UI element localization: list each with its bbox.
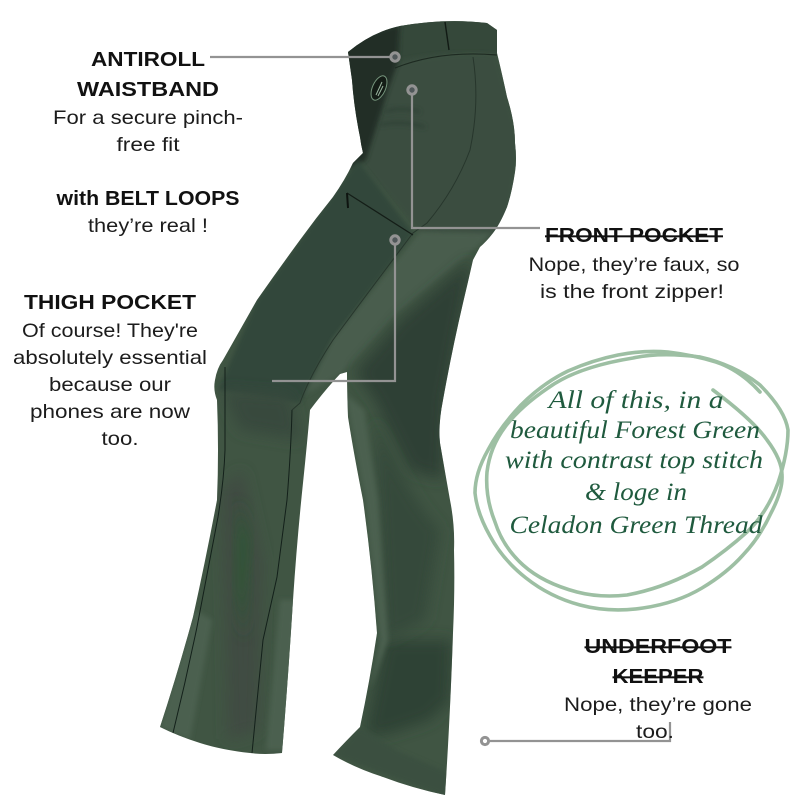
text block: belt loops: they’re real ! xyxy=(88,215,208,237)
text block: thigh pocket: because our xyxy=(49,374,172,396)
script note: with contrast top stitch xyxy=(505,447,763,474)
leader line: waistband xyxy=(210,53,399,61)
text block: antiroll waistband: WAISTBAND xyxy=(77,79,219,101)
text block: front pocket xyxy=(528,225,740,303)
text block: front pocket: FRONT POCKET xyxy=(545,225,723,247)
leader line: thigh pocket xyxy=(272,236,399,381)
script note: Celadon Green Thread xyxy=(510,512,763,539)
script note: & loge in xyxy=(585,479,687,506)
waistband and hip shading xyxy=(399,21,497,60)
text block: belt loops xyxy=(55,188,239,237)
hip wrinkles xyxy=(380,109,425,127)
text block: underfoot keeper: Nope, they’re gone xyxy=(564,694,752,716)
text block: antiroll waistband xyxy=(53,49,243,156)
leader line: underfoot keeper xyxy=(481,722,670,745)
front thigh panel shading xyxy=(218,160,413,403)
text block: antiroll waistband: ANTIROLL xyxy=(91,49,205,71)
text block: thigh pocket: absolutely essential xyxy=(13,347,207,369)
hand-drawn circle xyxy=(475,351,788,610)
text block: belt loops: with BELT LOOPS xyxy=(55,188,239,210)
script note: beautiful Forest Green xyxy=(510,417,760,444)
script note: All of this, in a xyxy=(546,387,724,414)
text block: thigh pocket: phones are now xyxy=(30,401,191,423)
text block: underfoot keeper: UNDERFOOT xyxy=(584,636,732,658)
seams xyxy=(173,367,225,733)
text block: front pocket: Nope, they’re faux, so xyxy=(528,254,740,276)
script note xyxy=(505,387,763,539)
logo badge xyxy=(368,73,390,103)
text block: front pocket: is the front zipper! xyxy=(540,281,724,303)
leader line: front pocket xyxy=(408,86,540,228)
text block: antiroll waistband: free fit xyxy=(116,134,180,156)
lighter side panel across the thigh xyxy=(305,232,493,395)
text block: thigh pocket: too. xyxy=(102,428,138,450)
text block: antiroll waistband: For a secure pinch- xyxy=(53,107,243,129)
text block: thigh pocket: Of course! They're xyxy=(22,320,198,342)
text block: underfoot keeper: KEEPER xyxy=(612,666,704,688)
text block: underfoot keeper: too. xyxy=(636,721,674,743)
knee folds xyxy=(232,396,294,434)
faux zipper xyxy=(347,193,413,235)
text block: underfoot keeper xyxy=(564,636,752,743)
pants photo xyxy=(160,21,516,795)
calf and flare sheen xyxy=(222,470,262,740)
text block: thigh pocket xyxy=(13,292,207,450)
back leg shading xyxy=(355,258,472,480)
text block: thigh pocket: THIGH POCKET xyxy=(24,292,196,314)
